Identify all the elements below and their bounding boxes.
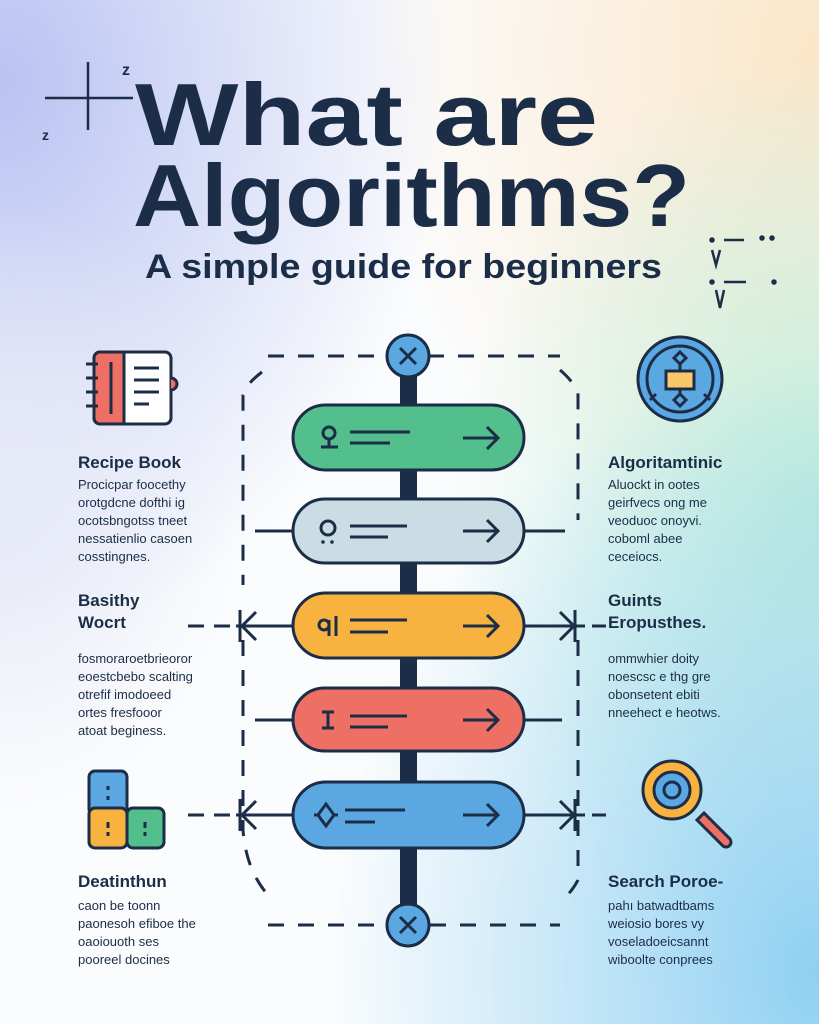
text: basithy wocrt: otrefif imodoeed — [78, 687, 171, 702]
text: basithy wocrt: Wocrt — [78, 613, 126, 632]
end node — [387, 904, 429, 946]
decoration: top-left plus — [42, 62, 133, 143]
text: search poroe: voseladoeicsannt — [608, 934, 709, 949]
text: algoritamtinic: coboml abee — [608, 531, 682, 546]
text: basithy wocrt — [78, 591, 193, 738]
text: recipe book: orotgdcne dofthi ig — [78, 495, 185, 510]
text: basithy wocrt: eoestcbebo scalting — [78, 669, 193, 684]
text: deatinthun — [78, 872, 196, 967]
icon: algorithm circle — [638, 337, 722, 421]
icon: recipe book — [86, 352, 177, 424]
decoration: top-left plus: z — [42, 127, 49, 143]
text: guints: Eropusthes. — [608, 613, 706, 632]
step 2: grey pill — [293, 499, 524, 563]
text: basithy wocrt: Basithy — [78, 591, 140, 610]
text: deatinthun: paonesoh efiboe the — [78, 916, 196, 931]
text: search poroe: pahı batwadtbams — [608, 898, 715, 913]
text: algoritamtinic: Algoritamtinic — [608, 453, 722, 472]
text: algoritamtinic: Aluockt in ootes — [608, 477, 700, 492]
icon: blocks — [89, 771, 164, 848]
text: search poroe — [607, 872, 723, 967]
text: guints: obonsetent ebiti — [608, 687, 700, 702]
decoration: top-right marks — [710, 236, 776, 308]
text: recipe book: nessatienlio casoen — [78, 531, 192, 546]
text: guints: noescsc e thg gre — [608, 669, 711, 684]
text: search poroe: weiosio bores vy — [607, 916, 705, 931]
title — [133, 65, 690, 245]
text: guints — [608, 591, 721, 720]
text: recipe book: ocotsbngotss tneet — [78, 513, 188, 528]
step 3: orange pill — [293, 593, 524, 658]
text: search poroe: wiboolte conprees — [607, 952, 713, 967]
spine — [400, 360, 417, 920]
text: recipe book: Procicpar foocethy — [78, 477, 186, 492]
text: recipe book: Recipe Book — [78, 453, 182, 472]
start node — [387, 335, 429, 377]
connectors — [188, 531, 606, 831]
icon: magnifier — [643, 761, 731, 847]
text: guints: ommwhier doity — [608, 651, 700, 666]
text: basithy wocrt: ortes fresfooor — [78, 705, 162, 720]
text: search poroe: Search Poroe- — [608, 872, 723, 891]
text: algoritamtinic: geirfvecs ong me — [608, 495, 707, 510]
text: deatinthun: Deatinthun — [78, 872, 167, 891]
text: algoritamtinic: veoduoc onoyvi. — [608, 513, 702, 528]
text: deatinthun: oaoiouoth ses — [78, 934, 159, 949]
decoration: top-left plus: z — [122, 62, 130, 79]
step 4: red pill — [293, 688, 524, 751]
text: algoritamtinic — [608, 453, 722, 564]
flowchart — [188, 335, 606, 946]
text: deatinthun: pooreel docines — [78, 952, 170, 967]
title: What are — [135, 65, 598, 164]
text: deatinthun: caon be toonn — [78, 898, 160, 913]
text: recipe book: cosstingnes. — [78, 549, 150, 564]
step 5: blue pill — [293, 782, 524, 848]
subtitle: A simple guide for beginners — [145, 248, 662, 286]
step 1: green pill — [293, 405, 524, 470]
title: Algorithms? — [133, 146, 690, 245]
dashed frame — [243, 356, 578, 925]
text: basithy wocrt: atoat beginess. — [78, 723, 166, 738]
text: guints: Guints — [608, 591, 662, 610]
text: guints: nneehect e heotws. — [608, 705, 721, 720]
text: recipe book — [78, 453, 192, 564]
text: basithy wocrt: fosmoraroetbrieoror — [78, 651, 193, 666]
text: algoritamtinic: ceceiocs. — [608, 549, 662, 564]
